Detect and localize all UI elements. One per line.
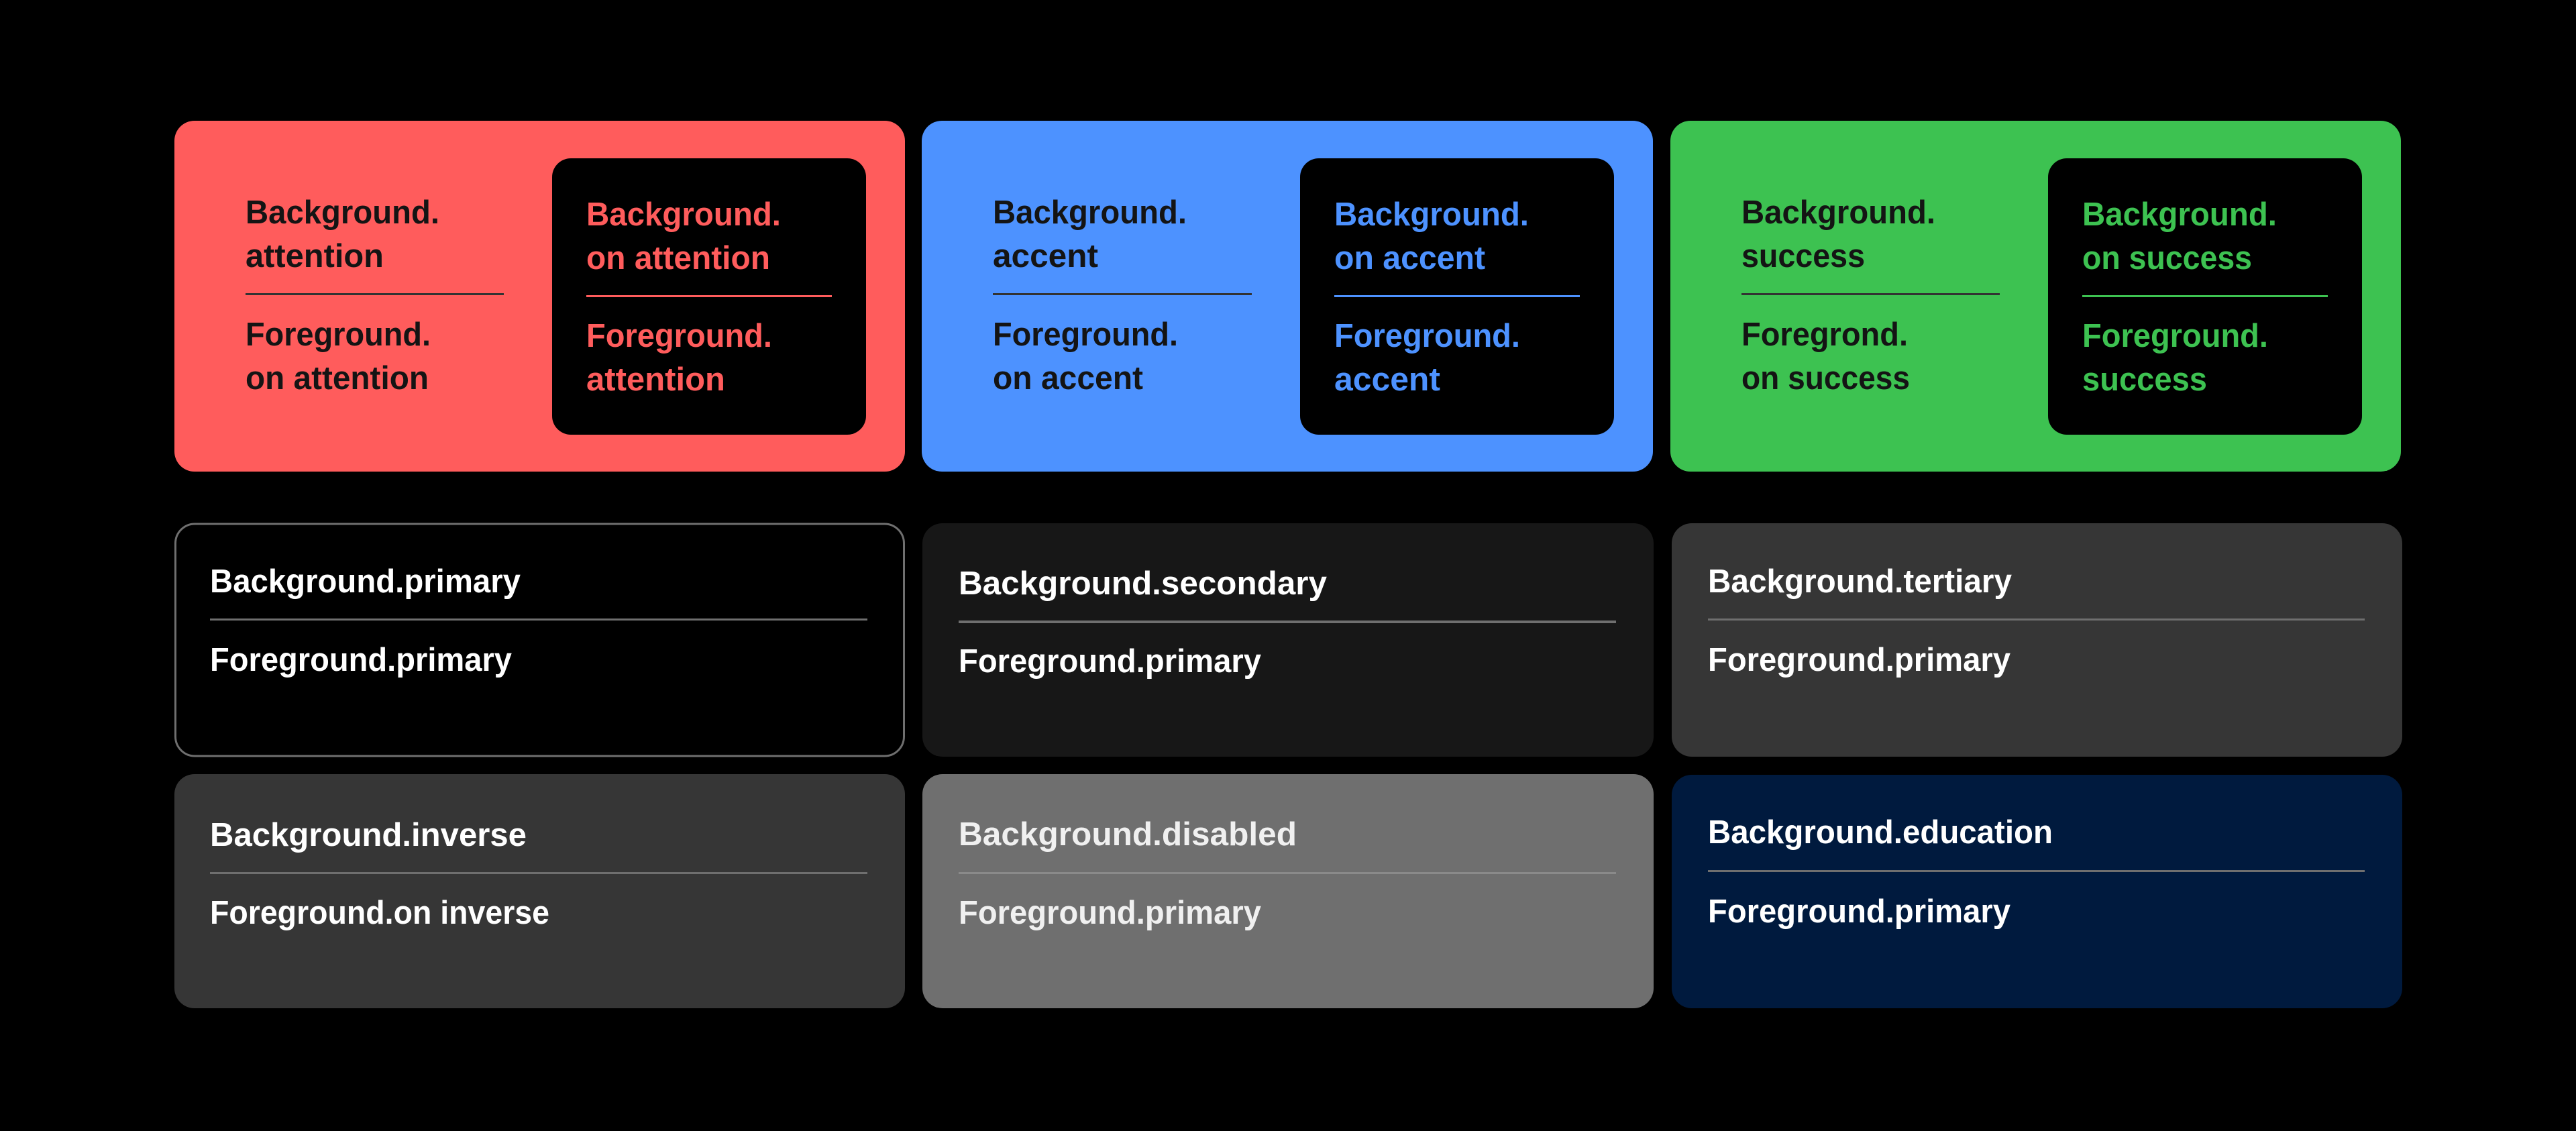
panel: background primary: Foreground.primary [210,642,512,678]
text block: accent tokens on blue: Foreground. [993,317,1178,353]
inner panel: accent on black: Background. [1334,197,1529,233]
panel: background primary [176,524,904,756]
panel: accent [922,121,1653,472]
inner panel: success on black: success [2082,362,2207,398]
panel: background primary: Background.primary [210,563,521,600]
panel: background inverse: Foreground.on inverse [210,895,549,931]
text block: accent tokens on blue: Background. [993,195,1187,231]
text block: accent tokens on blue: on accent [993,360,1143,396]
inner panel: accent on black [1300,158,1614,435]
inner panel: success on black [2048,158,2362,435]
inner panel: attention on black: Foreground. [586,318,772,354]
text block: success tokens on green: Foregrond. [1741,317,1908,353]
text block: success tokens on green: success [1741,238,1865,274]
text block: accent tokens on blue: accent [993,238,1098,274]
panel: background tertiary [1672,523,2402,757]
panel: background tertiary: Background.tertiary [1708,563,2012,600]
panel: background inverse: Background.inverse [210,817,527,853]
inner panel: accent on black: on accent [1334,240,1485,276]
text block: success tokens on green [1741,195,2000,396]
inner panel: success on black: Background. [2082,197,2277,233]
inner panel: attention on black: on attention [586,240,770,276]
panel: success [1670,121,2401,472]
text block: attention tokens on red: attention [246,238,384,274]
panel: background disabled [922,774,1654,1008]
text block: success tokens on green: Background. [1741,195,1935,231]
panel: background tertiary: Foreground.primary [1708,642,2010,678]
text block: attention tokens on red: on attention [246,360,429,396]
inner panel: success on black: Foreground. [2082,318,2268,354]
text block: attention tokens on red [246,195,504,396]
panel: background education: Background.education [1708,814,2053,851]
panel: attention [174,121,905,472]
panel: background education [1672,775,2402,1008]
text block: success tokens on green: on success [1741,360,1910,396]
panel: background secondary: Foreground.primary [959,643,1261,680]
panel: background secondary [922,523,1654,757]
inner panel: attention on black [552,158,866,435]
text block: accent tokens on blue [993,195,1252,396]
inner panel: attention on black: attention [586,362,725,398]
panel: background education: Foreground.primary [1708,894,2010,930]
inner panel: attention on black: Background. [586,197,781,233]
panel: background secondary: Background.secondary [959,566,1327,602]
panel: background disabled: Foreground.primary [959,895,1261,931]
panel: background inverse [174,774,905,1008]
text block: attention tokens on red: Foreground. [246,317,431,353]
inner panel: accent on black: accent [1334,362,1440,398]
inner panel: accent on black: Foreground. [1334,318,1520,354]
panel: background disabled: Background.disabled [959,816,1297,853]
inner panel: success on black: on success [2082,240,2252,276]
text block: attention tokens on red: Background. [246,195,439,231]
